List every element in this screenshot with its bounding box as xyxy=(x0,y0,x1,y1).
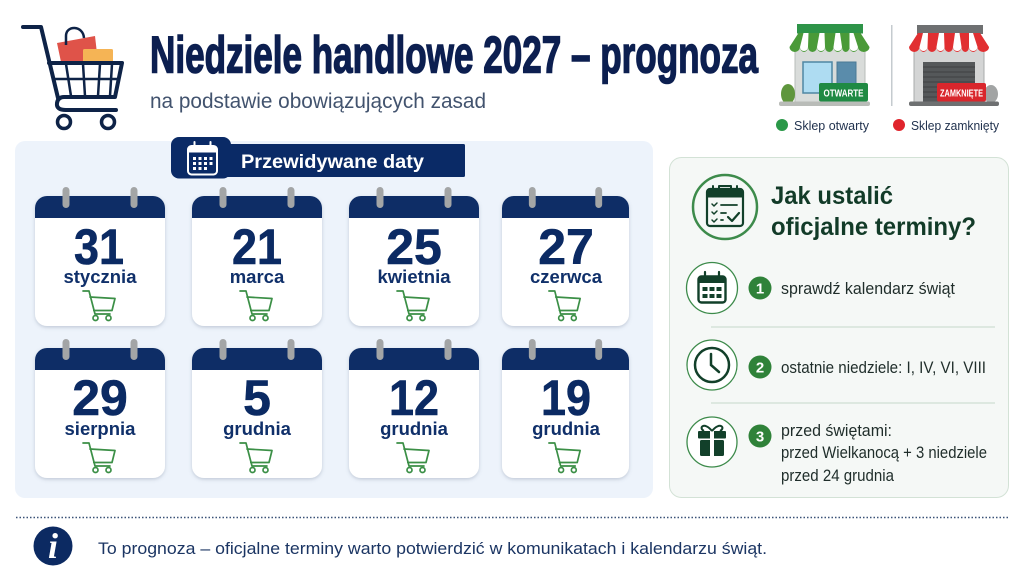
date card: 29 sierpnia xyxy=(35,339,165,478)
date card: 27 czerwca: 27 xyxy=(538,219,594,275)
date card: 27 czerwca: czerwca xyxy=(530,266,603,287)
heading banner: Przewidywane daty: Przewidywane daty xyxy=(241,151,424,173)
date card: 21 marca xyxy=(192,187,322,326)
date card: 12 grudnia xyxy=(349,339,479,478)
date card: 19 grudnia: 19 xyxy=(541,370,591,426)
icon: closed shop xyxy=(909,25,999,106)
date card: 31 stycznia: 31 xyxy=(74,219,124,275)
step 3: przed Wielkanocą + 3 niedziele xyxy=(781,444,987,462)
step 2: 2 xyxy=(756,360,764,376)
icon: info xyxy=(34,526,72,566)
date card: 29 sierpnia: 29 xyxy=(72,370,128,426)
date card: 5 grudnia xyxy=(192,339,322,478)
step 1 xyxy=(686,262,955,314)
icon: gift xyxy=(687,417,737,467)
icon: open shop: OTWARTE xyxy=(824,88,864,100)
date card: 12 grudnia: grudnia xyxy=(380,418,449,439)
legend: closed: Sklep zamknięty xyxy=(911,119,1000,133)
icon: calendar xyxy=(686,262,738,314)
step 2 xyxy=(687,340,986,390)
step 3: 3 xyxy=(756,428,764,446)
icon: info: i xyxy=(48,526,58,566)
heading: Jak ustalić xyxy=(771,182,893,210)
step 3: przed świętami: xyxy=(781,422,892,440)
step 3: przed 24 grudnia xyxy=(781,467,895,485)
icon: clock xyxy=(687,340,737,390)
divider xyxy=(891,25,892,106)
step 3 xyxy=(687,417,992,485)
date card: 25 kwietnia: 25 xyxy=(386,219,442,275)
date card: 21 marca: 21 xyxy=(232,219,282,275)
date card: 31 stycznia xyxy=(35,187,165,326)
date card: 27 czerwca xyxy=(502,187,629,326)
icon: open shop xyxy=(779,24,870,106)
heading: oficjalne terminy? xyxy=(771,213,976,241)
icon: closed shop: ZAMKNIĘTE xyxy=(940,88,983,100)
footer note: To prognoza – oficjalne terminy warto potwierdzić w komunikatach i kalendarzu świąt. xyxy=(98,540,767,558)
date card: 19 grudnia xyxy=(502,339,629,478)
date card: 12 grudnia: 12 xyxy=(389,370,439,426)
panel: predicted dates xyxy=(15,137,653,498)
legend: open: Sklep otwarty xyxy=(794,119,870,133)
date card: 25 kwietnia xyxy=(349,187,479,326)
panel: how to confirm dates xyxy=(670,158,1008,498)
date card: 5 grudnia: 5 xyxy=(243,370,271,426)
icon: checklist calendar xyxy=(693,175,757,239)
heading banner: Przewidywane daty xyxy=(171,137,465,178)
step 1: 1 xyxy=(756,280,764,298)
icon: shopping cart with bags xyxy=(23,27,122,128)
date card: 21 marca: marca xyxy=(230,266,285,287)
date card: 25 kwietnia: kwietnia xyxy=(378,266,451,287)
subtitle: na podstawie obowiązujących zasad xyxy=(150,90,486,113)
date card: 29 sierpnia: sierpnia xyxy=(65,418,136,439)
date card: 31 stycznia: stycznia xyxy=(63,266,137,287)
date card: 19 grudnia: grudnia xyxy=(532,418,601,439)
date card: 5 grudnia: grudnia xyxy=(223,418,292,439)
step 1: sprawdź kalendarz świąt xyxy=(781,280,955,298)
step 2: ostatnie niedziele: I, IV, VI, VIII xyxy=(781,359,986,377)
